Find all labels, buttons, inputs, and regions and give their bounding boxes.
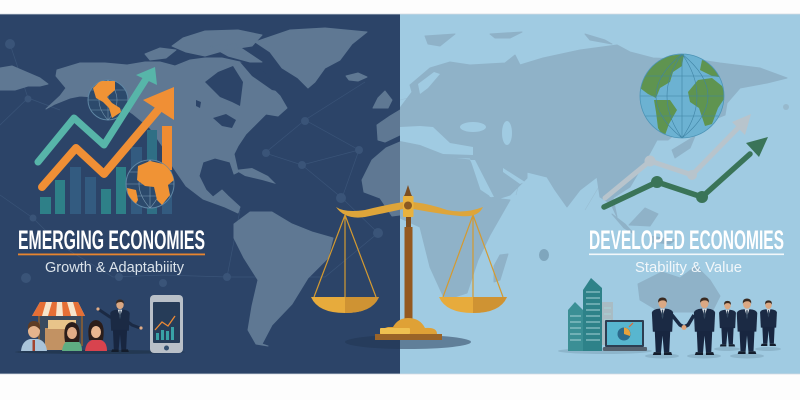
icon: small orange globe <box>88 80 128 120</box>
icon: smartphone with chart <box>150 295 183 353</box>
left pan <box>311 215 379 313</box>
icon: large orange globe <box>126 160 174 208</box>
icon: balance scale <box>311 185 507 349</box>
subheading: growth and adaptability: Growth & Adaptabiiity <box>45 259 184 276</box>
line chart: orange arrow <box>42 87 174 187</box>
bar chart: emerging growth <box>40 126 172 214</box>
icon: presenter <box>96 299 143 352</box>
icon: business people shaking hands <box>645 297 781 358</box>
icon: market stall with vendors <box>15 302 185 354</box>
network lines and nodes: left <box>0 39 383 287</box>
divider: white underline <box>589 254 784 255</box>
vendor: woman in red <box>85 320 107 351</box>
subheading: stability and value: Stability & Value <box>635 259 742 276</box>
vendor: man <box>21 321 47 351</box>
line chart: grey arrow <box>605 114 751 198</box>
panel: developed economies background <box>400 14 800 374</box>
map inland water: right <box>400 72 525 197</box>
divider: orange underline <box>18 254 205 255</box>
right pan <box>439 215 507 313</box>
icon: green globe <box>640 54 726 138</box>
icon: office buildings and laptop <box>558 278 652 354</box>
network lines and nodes: right <box>400 98 789 210</box>
line chart: teal arrow <box>38 67 157 162</box>
world map: right half <box>400 32 787 312</box>
map inland water: left <box>196 62 282 128</box>
vendor: woman in green <box>62 322 82 351</box>
world map: left half <box>0 28 400 346</box>
heading: emerging economies: EMERGING ECONOMIES <box>18 225 205 255</box>
panel: emerging economies background <box>0 14 400 374</box>
line chart: green arrow <box>604 137 768 207</box>
